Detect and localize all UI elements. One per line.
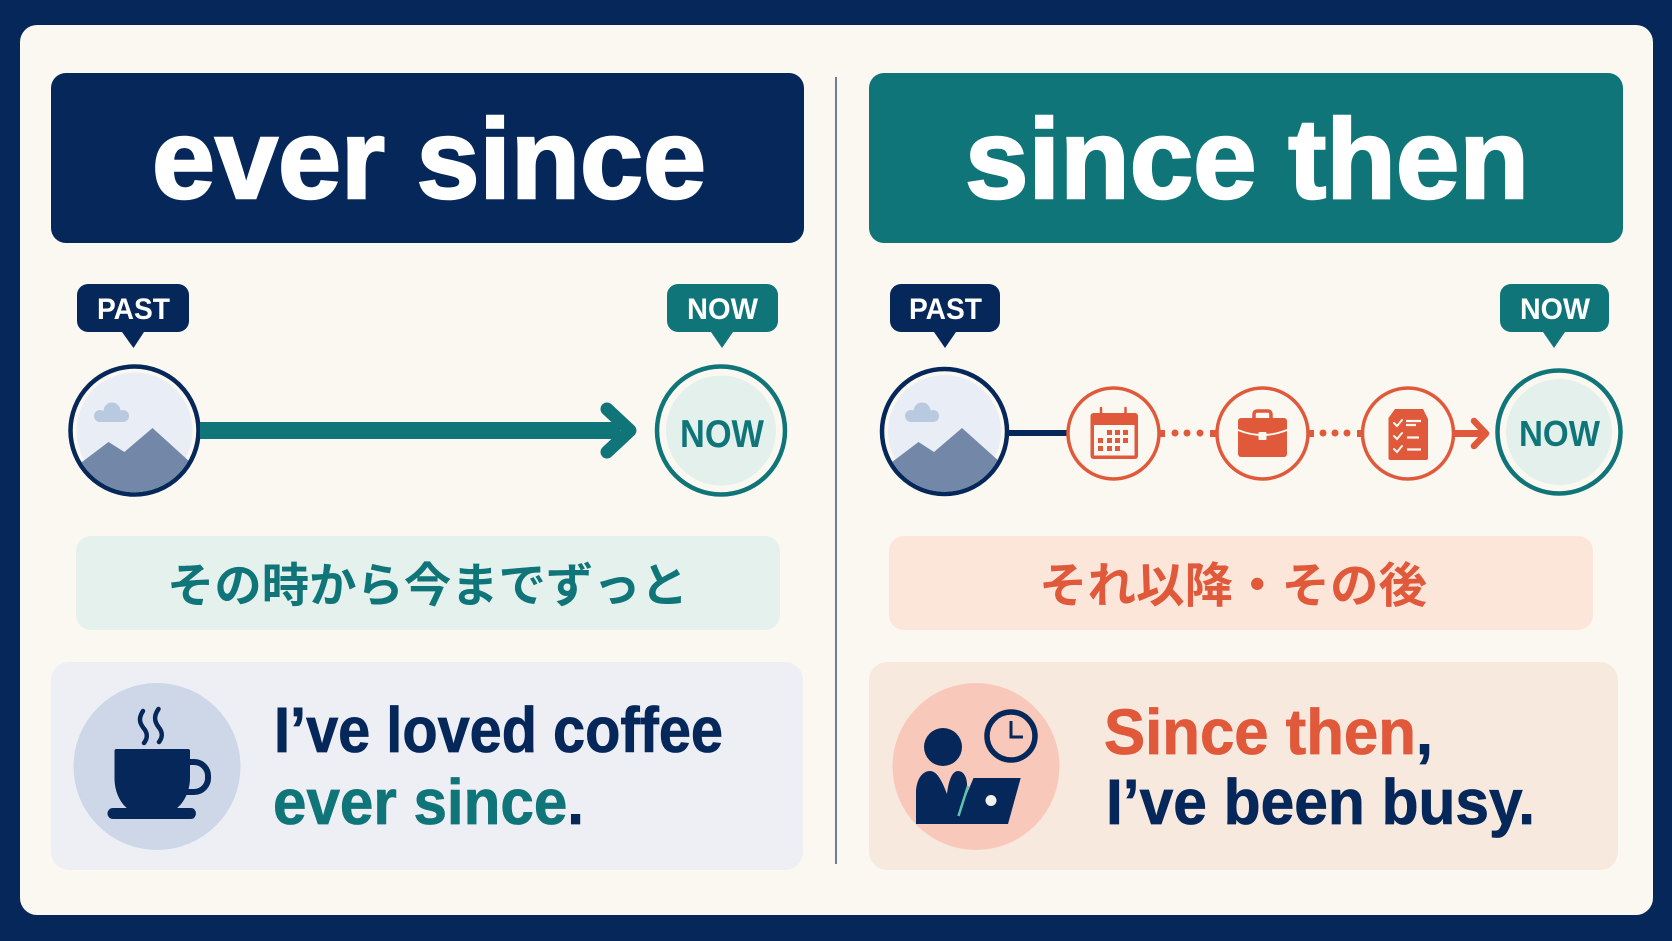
icon: now circle: NOW — [680, 413, 764, 456]
meaning: Japanese pill: その時から今までずっと — [167, 559, 688, 612]
label: NOW — [667, 284, 778, 348]
label: PAST — [890, 284, 1000, 348]
icon: coffee cup — [74, 683, 240, 850]
meaning: Japanese pill — [889, 536, 1593, 630]
arrow: to now — [1454, 421, 1486, 446]
example text: I’ve loved coffee — [274, 694, 723, 766]
icon: calendar — [1068, 388, 1159, 479]
label: NOW — [1500, 284, 1609, 348]
timeline: past to now through activities — [880, 284, 1620, 500]
label: PAST — [77, 284, 189, 348]
icon: now circle — [1498, 370, 1620, 494]
label: PAST: PAST — [909, 293, 982, 326]
connector: dotted line 2 — [1309, 430, 1362, 437]
icon: now circle: NOW — [1519, 413, 1600, 454]
example sentence panel — [869, 662, 1618, 870]
label: NOW: NOW — [687, 293, 759, 326]
title: since then — [869, 73, 1623, 243]
title: since then: since then — [965, 96, 1529, 222]
connector: navy line — [1005, 430, 1069, 436]
example text: Since then, — [1104, 696, 1433, 768]
icon: briefcase — [1217, 388, 1308, 479]
example sentence panel — [51, 662, 803, 870]
example text: I’ve been busy. — [1106, 766, 1535, 838]
connector: dotted line 1 — [1160, 430, 1216, 437]
arrow: continuous line — [200, 409, 630, 452]
example text — [1104, 696, 1535, 838]
icon: past landscape circle — [880, 369, 1010, 500]
example text — [273, 694, 723, 838]
icon: person with laptop and clock — [892, 683, 1060, 850]
timeline: continuous arrow from past to now — [70, 284, 785, 500]
title: ever since: ever since — [152, 96, 706, 222]
label: NOW: NOW — [1520, 293, 1591, 326]
panel: since then — [869, 73, 1623, 870]
icon: past landscape circle — [70, 366, 200, 500]
icon: checklist document — [1362, 388, 1454, 479]
panel: ever since — [51, 73, 804, 870]
icon: now circle — [657, 366, 785, 494]
title: ever since — [51, 73, 804, 243]
meaning: Japanese pill — [76, 536, 780, 630]
label: PAST: PAST — [97, 293, 170, 326]
example text: ever since. — [273, 766, 584, 838]
meaning: Japanese pill: それ以降・その後 — [1039, 560, 1427, 613]
